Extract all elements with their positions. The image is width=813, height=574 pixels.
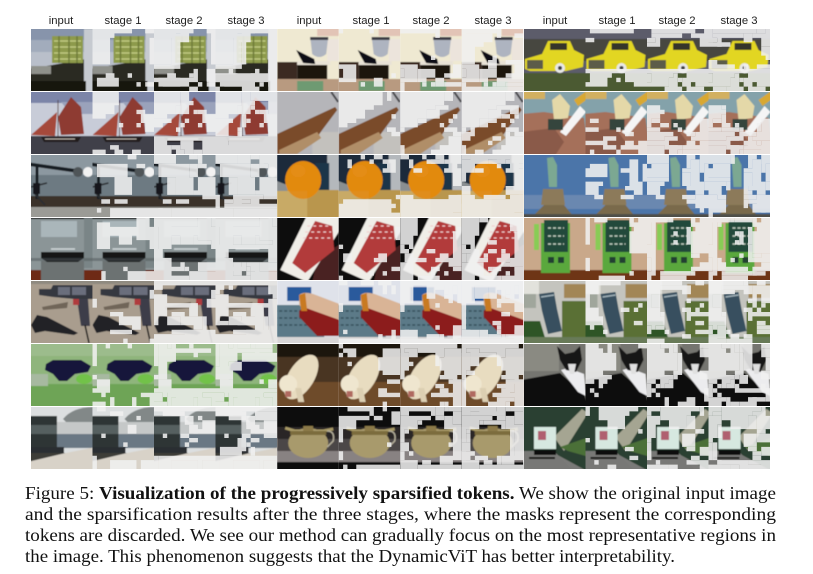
column headings: right group: input bbox=[543, 15, 568, 27]
column headings: left group: stage 2 bbox=[165, 15, 203, 27]
column headings: right group: stage 1 bbox=[598, 15, 636, 27]
row: scoreboard bbox=[31, 29, 277, 91]
row: sailing ship bbox=[31, 92, 277, 154]
row: statue of liberty bbox=[524, 155, 770, 217]
panel: middle image group bbox=[274, 15, 527, 472]
column headings: middle group: input bbox=[297, 15, 322, 27]
row: mailbox in foliage bbox=[524, 281, 770, 343]
column headings: left group: stage 1 bbox=[104, 15, 142, 27]
column headings: right group bbox=[543, 15, 758, 27]
column headings: middle group: stage 2 bbox=[412, 15, 450, 27]
row: white dog bbox=[277, 344, 524, 406]
row: saxophone bbox=[277, 92, 524, 154]
figure caption: the image. This phenomenon suggests that the DynamicViT has better interpretability. bbox=[25, 546, 675, 566]
figure caption: Figure 5: Visualization of the progressively sparsified tokens. We show the original input image bbox=[25, 483, 776, 503]
panel: right image group bbox=[521, 15, 774, 472]
row: black and white dog bbox=[524, 344, 770, 406]
column headings: middle group: stage 3 bbox=[474, 15, 512, 27]
column headings: right group: stage 2 bbox=[658, 15, 696, 27]
column headings: left group bbox=[49, 15, 265, 27]
row: green payphone bbox=[524, 218, 770, 280]
row: aircraft wing bbox=[31, 155, 277, 217]
row: teapot bbox=[277, 407, 524, 469]
row: black machine bbox=[31, 218, 277, 280]
column headings: middle group: stage 1 bbox=[352, 15, 390, 27]
row: orange bbox=[277, 155, 524, 217]
panel: left image group bbox=[28, 15, 280, 472]
figure caption: tokens are discarded. We see our method can gradually focus on the most representative regions in bbox=[25, 525, 776, 545]
row: lighter in hand bbox=[524, 92, 770, 154]
column headings: middle group bbox=[297, 15, 512, 27]
row: pill bottle bbox=[277, 281, 524, 343]
row: heat gun bbox=[31, 281, 277, 343]
column headings: left group: input bbox=[49, 15, 74, 27]
row: white truck on road bbox=[524, 407, 770, 469]
row: scale and bird bbox=[277, 29, 524, 91]
row: black bear bbox=[31, 344, 277, 406]
column headings: left group: stage 3 bbox=[227, 15, 265, 27]
figure caption: and the sparsification results after the three stages, where the masks represent the corresponding bbox=[25, 504, 776, 524]
row: yellow truck bbox=[524, 29, 770, 91]
column headings: right group: stage 3 bbox=[720, 15, 758, 27]
row: train bbox=[31, 407, 277, 469]
figure caption bbox=[25, 483, 776, 566]
row: red keypad bbox=[277, 218, 524, 280]
